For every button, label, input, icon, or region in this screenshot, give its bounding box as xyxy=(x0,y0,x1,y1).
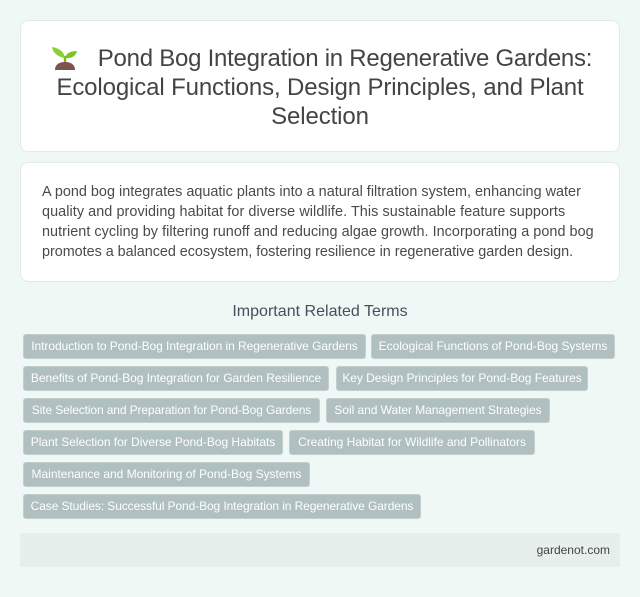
tag xyxy=(23,462,310,487)
tag xyxy=(23,398,320,423)
panel: title card: Selection xyxy=(271,103,369,130)
tag: Soil and Water Management Strategies xyxy=(334,403,542,417)
panel: summary card: A pond bog integrates aquatic plants into a natural filtration system, enhancing water xyxy=(42,184,581,200)
tag list xyxy=(23,334,615,519)
tag: Site Selection and Preparation for Pond-Bog Gardens xyxy=(32,403,311,417)
tag: Ecological Functions of Pond-Bog Systems xyxy=(379,339,607,353)
tag xyxy=(336,366,588,391)
panel: title card xyxy=(20,20,620,152)
tag xyxy=(23,430,283,455)
panel: title card: Pond Bog Integration in Regenerative Gardens: xyxy=(98,45,592,72)
tag: Creating Habitat for Wildlife and Pollinators xyxy=(298,435,526,449)
tag: Benefits of Pond-Bog Integration for Garden Resilience xyxy=(31,371,321,385)
footer credit: gardenot.com xyxy=(537,543,610,557)
footer bar xyxy=(20,533,620,567)
panel: title card: Ecological Functions, Design Principles, and Plant xyxy=(56,74,584,101)
tag xyxy=(23,494,421,519)
tag xyxy=(23,334,366,359)
title xyxy=(56,45,592,130)
tag xyxy=(23,366,329,391)
panel: summary card xyxy=(20,162,620,282)
tag: Case Studies: Successful Pond-Bog Integration in Regenerative Gardens xyxy=(31,499,413,513)
panel: summary card: quality and providing habitat for diverse wildlife. This sustainable feature supports xyxy=(42,204,565,220)
tag: Maintenance and Monitoring of Pond-Bog Systems xyxy=(32,467,301,481)
icon: seedling xyxy=(52,47,77,70)
tag: Introduction to Pond-Bog Integration in Regenerative Gardens xyxy=(31,339,358,353)
panel: summary card: promotes a balanced ecosystem, fostering resilience in regenerative garden design. xyxy=(42,244,573,260)
panel: summary card: nutrient cycling by filtering runoff and reducing algae growth. Incorporating a pond bog xyxy=(42,224,594,240)
heading: important related terms: Important Related Terms xyxy=(232,303,408,320)
tag xyxy=(326,398,550,423)
tag xyxy=(371,334,615,359)
summary text xyxy=(42,184,594,260)
tag: Key Design Principles for Pond-Bog Features xyxy=(342,371,582,385)
tag: Plant Selection for Diverse Pond-Bog Habitats xyxy=(31,435,275,449)
tag xyxy=(289,430,535,455)
